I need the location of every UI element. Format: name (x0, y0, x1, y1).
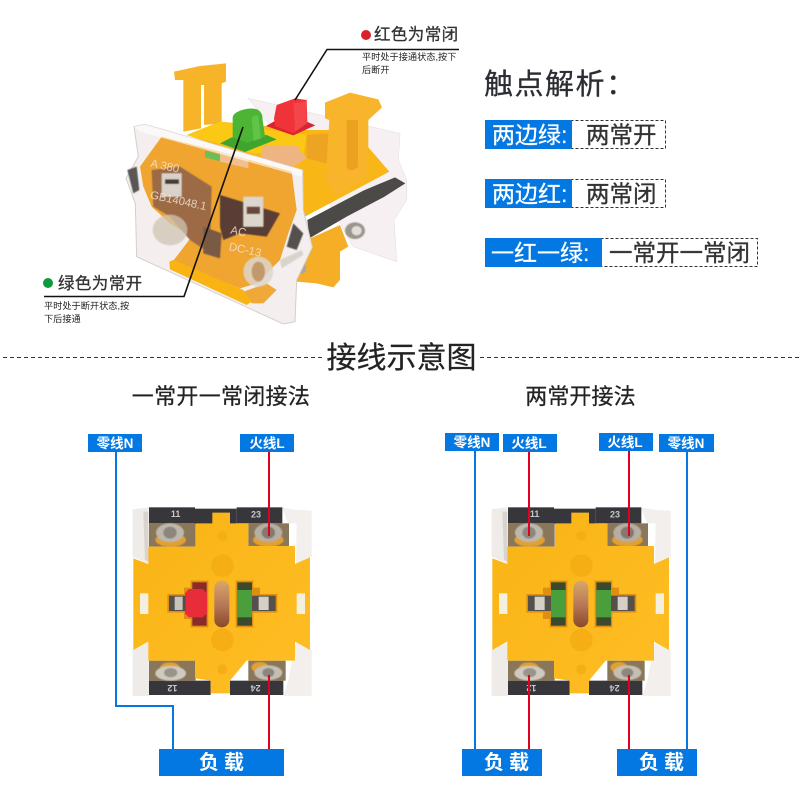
diagram: left module: 23 (251, 510, 261, 520)
moulded plate lettering: GB14048.1 (149, 189, 208, 213)
terminal bars (508, 507, 554, 523)
screws (149, 523, 196, 547)
label: load, left diagram: 负载 (199, 751, 249, 774)
row: both green: 两常开 (586, 122, 656, 148)
red contact (169, 582, 207, 626)
diagram: right module: 24 (610, 683, 620, 693)
label: neutral 2, right diagram: 零线N (668, 435, 704, 451)
back clear plate (248, 98, 407, 262)
screws (508, 523, 555, 547)
row: both green: 两边绿: (492, 122, 567, 148)
button openings (526, 581, 567, 627)
green dot (43, 278, 53, 288)
callout heading: 红色为常闭 (374, 25, 458, 44)
diagram: right module: 23 (610, 510, 620, 520)
clear corners (492, 507, 508, 564)
product photo: contact block (126, 63, 407, 324)
left green contact (528, 582, 566, 626)
terminal bars (149, 507, 195, 523)
label: live, left diagram: 火线L (249, 435, 285, 451)
yellow housing top (187, 122, 389, 217)
section divider lines (3, 356, 800, 358)
label: live 2, right diagram: 火线L (607, 434, 643, 450)
green button (220, 108, 277, 152)
moulded plate lettering (149, 158, 262, 260)
diagram: right module: 12 (526, 683, 536, 693)
row: one red one green: 一红一绿: (491, 240, 589, 266)
terminal labels: 11 (171, 509, 180, 519)
wires: left diagram (116, 452, 269, 749)
row: both red (485, 179, 666, 208)
label: live 2, right diagram (599, 433, 653, 451)
label: load 2, right diagram: 负载 (639, 751, 689, 774)
label: neutral 1, right diagram: 零线N (454, 434, 490, 450)
diagram: left module: 24 (251, 683, 261, 693)
front clear plate (126, 124, 312, 324)
label: load 1, right diagram: 负载 (484, 751, 534, 774)
callout: red normally closed (295, 25, 459, 100)
row: one red one green: 一常开一常闭 (609, 240, 750, 266)
callout description (362, 51, 456, 75)
green contact (237, 582, 276, 626)
inner contacts and wiring (127, 167, 303, 287)
yellow plate (492, 513, 669, 693)
plate edge highlight (134, 124, 303, 177)
right green contact (596, 582, 635, 626)
row: both green (485, 120, 666, 149)
row: both red: 两边红: (492, 181, 567, 207)
subheading: two NO wiring: 两常开接法 (525, 384, 636, 409)
rear yellow clip (174, 63, 226, 132)
moulded plate lettering: DC-13 (228, 241, 262, 260)
moulded plate lettering: A 380 (149, 158, 180, 176)
label: live, left diagram (240, 434, 294, 452)
plate circles (211, 554, 234, 577)
label: neutral 2, right diagram (659, 434, 714, 452)
callout: green normally open (43, 127, 243, 324)
diagram: right module (492, 507, 671, 696)
section heading: 接线示意图 (326, 342, 476, 375)
label: load 2, right diagram (617, 749, 697, 776)
dark side strip (307, 177, 405, 238)
leader line: red button (295, 50, 459, 100)
inner orange base (140, 137, 297, 288)
clear corners (133, 507, 149, 564)
diagram: left module (133, 507, 312, 696)
label: load 1, right diagram (462, 749, 542, 776)
label: live 1, right diagram (503, 434, 557, 452)
callout description (44, 300, 129, 324)
panel: contact analysis (484, 68, 758, 267)
subheading: one NO one NC wiring: 一常开一常闭接法 (132, 384, 310, 409)
front yellow clip (325, 93, 382, 197)
callout description: 平时处于接通状态,按下 (362, 51, 456, 62)
callout description: 平时处于断开状态,按 (44, 300, 129, 311)
side screw (297, 222, 365, 274)
moulded plate lettering: AC (229, 225, 247, 240)
leader line: green button (44, 127, 243, 296)
row: both red: 两常闭 (586, 181, 656, 207)
side windows (140, 593, 148, 614)
label: neutral, left diagram (88, 434, 142, 452)
plate circles (570, 554, 593, 577)
lower yellow blocks (297, 225, 348, 287)
yellow plate (133, 513, 310, 693)
label: neutral, left diagram: 零线N (97, 435, 133, 451)
red dot (361, 30, 371, 40)
callout heading: 绿色为常开 (58, 274, 142, 293)
center slot (573, 581, 588, 627)
button openings (167, 581, 208, 627)
label: load, left diagram (159, 749, 284, 776)
row: one red one green (485, 238, 758, 267)
wires: right diagram (475, 451, 687, 749)
center slot (214, 581, 229, 627)
callout description: 后断开 (362, 64, 390, 75)
label: live 1, right diagram: 火线L (511, 435, 547, 451)
label: neutral 1, right diagram (445, 433, 499, 451)
heading: 触点解析： (484, 68, 637, 101)
diagram: left module: 12 (167, 683, 177, 693)
terminal labels: 11 (530, 509, 539, 519)
callout description: 下后接通 (44, 313, 81, 324)
side windows (499, 593, 507, 614)
red button (266, 98, 315, 135)
